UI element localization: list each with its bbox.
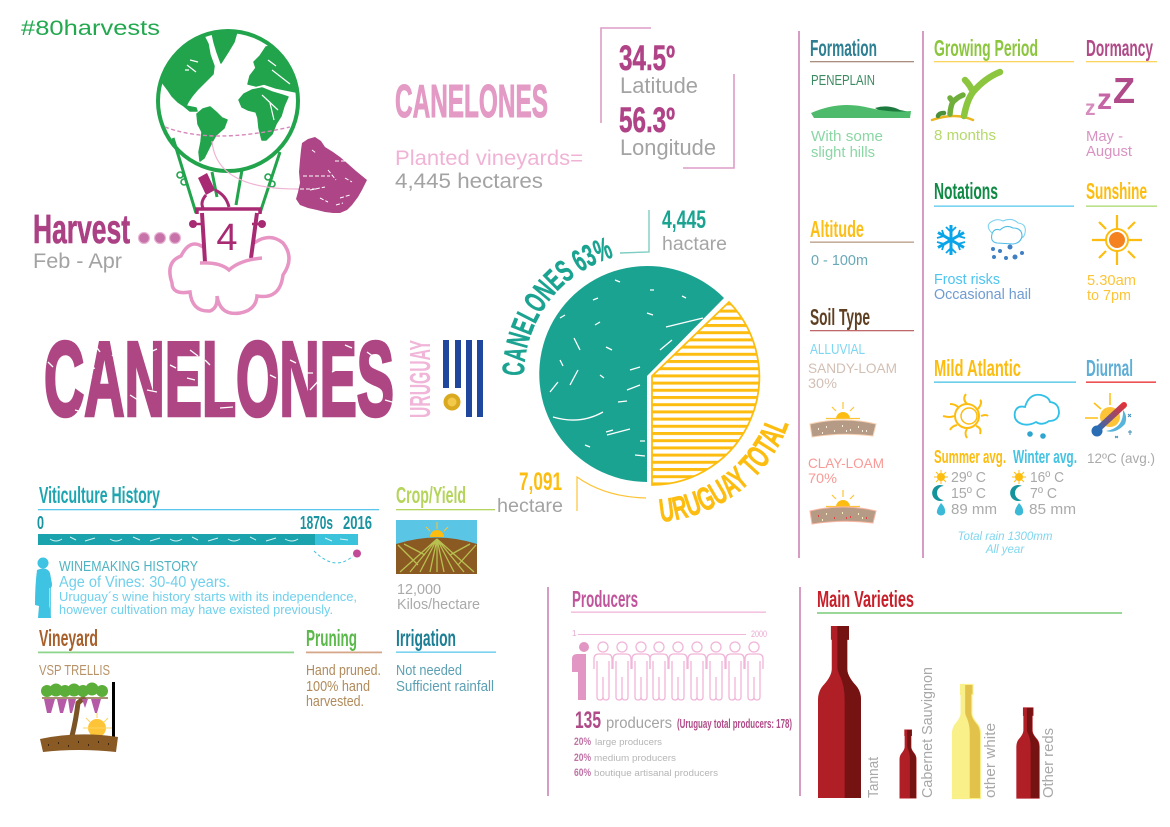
icon: sandy soil <box>810 402 876 437</box>
panel: soil type: 30% <box>808 375 837 391</box>
winter values: 85 mm <box>1029 501 1076 518</box>
panel: mild atlantic <box>932 355 1077 556</box>
panel: producers: boutique artisanal producers <box>594 768 719 778</box>
panel: notations: Occasional hail <box>934 287 1031 303</box>
link line to Uruguay map <box>212 141 300 189</box>
callout 4,445: hactare <box>662 234 727 255</box>
panel: main varieties: Main Varieties <box>817 586 914 612</box>
panel: notations: Notations <box>934 178 998 204</box>
panel: notations: Frost risks <box>934 272 1000 288</box>
summer values: 89 mm <box>951 501 997 518</box>
callout 4,445 <box>620 206 727 255</box>
panel: viticulture history: Uruguay´s wine history starts with its independence, <box>59 590 357 604</box>
panel: viticulture history: Age of Vines: 30-40 years. <box>59 574 230 591</box>
panel: producers: Producers <box>572 586 638 612</box>
texture <box>550 280 703 460</box>
panel: altitude: 0 - 100m <box>811 252 868 269</box>
harvest label: Feb - Apr <box>33 250 122 273</box>
coordinates box: 34.5º <box>619 39 675 78</box>
bottle: Cabernet Sauvignon <box>900 730 916 798</box>
planted vineyards <box>395 147 583 193</box>
dashed connector with dot <box>314 550 361 563</box>
panel: producers: large producers <box>595 737 663 747</box>
panel: pruning: harvested. <box>306 693 364 710</box>
icon: clay soil <box>810 490 876 524</box>
harvest label: Harvest <box>33 206 130 252</box>
panel: sunshine: to 7pm <box>1087 287 1131 304</box>
coordinates box: Latitude <box>620 73 698 98</box>
Uruguay vertical label: URUGUAY <box>405 340 437 418</box>
panel: producers: 20% <box>574 736 591 748</box>
coordinates box: Longitude <box>620 135 716 160</box>
panel: producers <box>571 586 792 779</box>
panel: viticulture history: however cultivation may have existed previously. <box>59 603 333 617</box>
panel: soil type: CLAY-LOAM <box>808 455 884 471</box>
panel: formation: PENEPLAIN <box>811 72 875 89</box>
icon: sun <box>1092 215 1142 265</box>
panel: producers: 135 <box>575 707 601 734</box>
panel: viticulture history: 1870s <box>300 513 333 533</box>
panel: dormancy <box>1085 35 1157 160</box>
bottle: other white <box>953 685 980 798</box>
panel: sunshine: 5.30am <box>1087 272 1136 289</box>
panel: producers: 60% <box>574 767 591 779</box>
panel: irrigation: Irrigation <box>396 625 456 651</box>
bottle labels: other white <box>983 723 999 798</box>
basket: 4 <box>216 217 238 259</box>
callout 7,091: hectare <box>497 496 563 517</box>
panel: soil type: SANDY-LOAM <box>808 360 897 376</box>
bottle labels: Other reds <box>1041 728 1057 798</box>
planted vineyards: 4,445 hectares <box>395 170 543 193</box>
harvest label <box>33 206 180 273</box>
bottle labels <box>866 667 1057 798</box>
coordinates box <box>601 28 734 168</box>
panel: altitude: Altitude <box>810 216 864 242</box>
cloud <box>170 238 289 313</box>
panel: pruning: Pruning <box>306 625 357 651</box>
panel: viticulture history: Viticulture History <box>39 482 160 508</box>
panel: mild atlantic: All year <box>985 544 1025 556</box>
callout 7,091: 7,091 <box>519 468 562 496</box>
icon: thermometer and sun <box>1085 393 1132 438</box>
icon: sleeping zzz: z <box>1097 83 1112 116</box>
map of Uruguay <box>296 137 367 213</box>
icon: sleeping zzz: Z <box>1113 70 1135 111</box>
panel: growing period: 8 months <box>934 127 996 144</box>
scale <box>572 629 767 639</box>
panel: vineyard <box>38 625 294 752</box>
winter values: 7º C <box>1030 485 1057 502</box>
panel: irrigation <box>396 625 496 695</box>
callout 7,091 <box>497 468 646 517</box>
icon: sprouts <box>932 72 1000 120</box>
coordinates box: 56.3º <box>619 101 675 140</box>
panel: main varieties <box>817 586 1122 798</box>
panel: diurnal: 12ºC (avg.) <box>1087 450 1155 466</box>
panel: growing period <box>932 35 1074 144</box>
ropes <box>173 138 280 213</box>
panel: pruning: 100% hand <box>306 678 370 695</box>
panel: soil type <box>808 304 914 524</box>
panel: crop yield: Crop/Yield <box>396 482 466 508</box>
icon: snowflake <box>937 225 965 255</box>
panel: altitude <box>810 216 914 269</box>
pie chart <box>502 238 789 522</box>
icon: summer sun <box>943 394 988 438</box>
panel: formation: Formation <box>810 35 877 61</box>
panel: pruning: Hand pruned. <box>306 662 381 679</box>
icon: elderly person <box>35 558 52 618</box>
panel: diurnal <box>1085 355 1156 466</box>
icon: hills <box>811 105 911 118</box>
big title <box>44 320 394 438</box>
panel: formation <box>810 35 914 161</box>
panel: diurnal: Diurnal <box>1086 355 1133 381</box>
basket <box>189 209 266 262</box>
Uruguay total slice <box>652 302 759 485</box>
panel: formation: slight hills <box>811 144 875 161</box>
panel: soil type: ALLUVIAL <box>810 341 865 358</box>
summer values: 15º C <box>951 485 986 502</box>
panel: crop yield <box>396 482 495 613</box>
panel: pruning <box>306 625 382 710</box>
panel: viticulture history: 2016 <box>343 513 372 533</box>
pictogram: ten people, one filled <box>572 642 763 700</box>
bottle labels: Cabernet Sauvignon <box>920 667 936 798</box>
big title: CANELONES <box>44 320 394 438</box>
panel: soil type: Soil Type <box>810 304 870 330</box>
panel: crop yield: Kilos/hectare <box>397 597 480 613</box>
icon: trellised vine <box>40 682 118 752</box>
panel: sunshine <box>1086 178 1157 304</box>
panel: irrigation: Not needed <box>396 662 462 679</box>
panel: producers: medium producers <box>594 753 677 763</box>
flag of Uruguay <box>443 340 483 417</box>
scale: 2000 <box>751 629 767 639</box>
icon: winter cloud <box>1015 395 1059 439</box>
wine bottle <box>198 173 229 208</box>
summer values: 29º C <box>951 469 986 486</box>
curved label Canelones: CANELONES 63% <box>502 238 612 375</box>
icon: hail cloud <box>988 219 1025 260</box>
balloon illustration <box>158 28 367 313</box>
curved label Uruguay total: URUGUAY TOTAL <box>658 422 789 522</box>
cloud inner line <box>200 258 262 270</box>
panel: dormancy: May - <box>1086 128 1123 145</box>
panel: growing period: Growing Period <box>934 35 1038 61</box>
timeline bar <box>38 534 358 545</box>
summer values <box>932 469 997 518</box>
panel: producers: (Uruguay total producers: 178) <box>677 717 792 731</box>
callout 4,445: 4,445 <box>662 206 706 234</box>
panel: mild atlantic: Summer avg. <box>934 447 1006 467</box>
panel: notations <box>934 178 1074 303</box>
panel: viticulture history: WINEMAKING HISTORY <box>59 558 198 575</box>
region name small: CANELONES <box>395 75 548 127</box>
hashtag: #80harvests <box>21 17 160 40</box>
panel: soil type: 70% <box>808 470 837 486</box>
panel: viticulture history: 0 <box>37 513 44 533</box>
bottle: Tannat <box>818 626 861 798</box>
Canelones slice <box>539 266 724 482</box>
panel: formation: With some <box>811 128 883 145</box>
panel: mild atlantic: Mild Atlantic <box>934 355 1021 381</box>
icon: sleeping zzz <box>1085 70 1135 120</box>
panel: vineyard: Vineyard <box>39 625 98 651</box>
panel: producers: producers <box>606 715 672 732</box>
globe <box>158 28 298 171</box>
panel: crop yield: 12,000 <box>397 582 441 598</box>
panel: producers: 20% <box>574 752 591 764</box>
panel: irrigation: Sufficient rainfall <box>396 678 494 695</box>
icon: sleeping zzz: z <box>1085 97 1096 120</box>
winter values <box>1010 469 1076 518</box>
scale: 1 <box>572 629 577 638</box>
winter values: 16º C <box>1030 469 1064 486</box>
panel: vineyard: VSP TRELLIS <box>39 662 110 679</box>
panel: dormancy: August <box>1086 143 1133 160</box>
column dividers <box>548 31 923 796</box>
panel: mild atlantic: Winter avg. <box>1013 447 1077 467</box>
panel: mild atlantic: Total rain 1300mm <box>958 531 1053 543</box>
icon: vineyard rows <box>396 520 477 574</box>
panel: viticulture history <box>35 482 379 618</box>
bottle labels: Tannat <box>866 757 882 798</box>
bottle: other reds <box>1017 708 1039 798</box>
planted vineyards: Planted vineyards= <box>395 147 583 170</box>
